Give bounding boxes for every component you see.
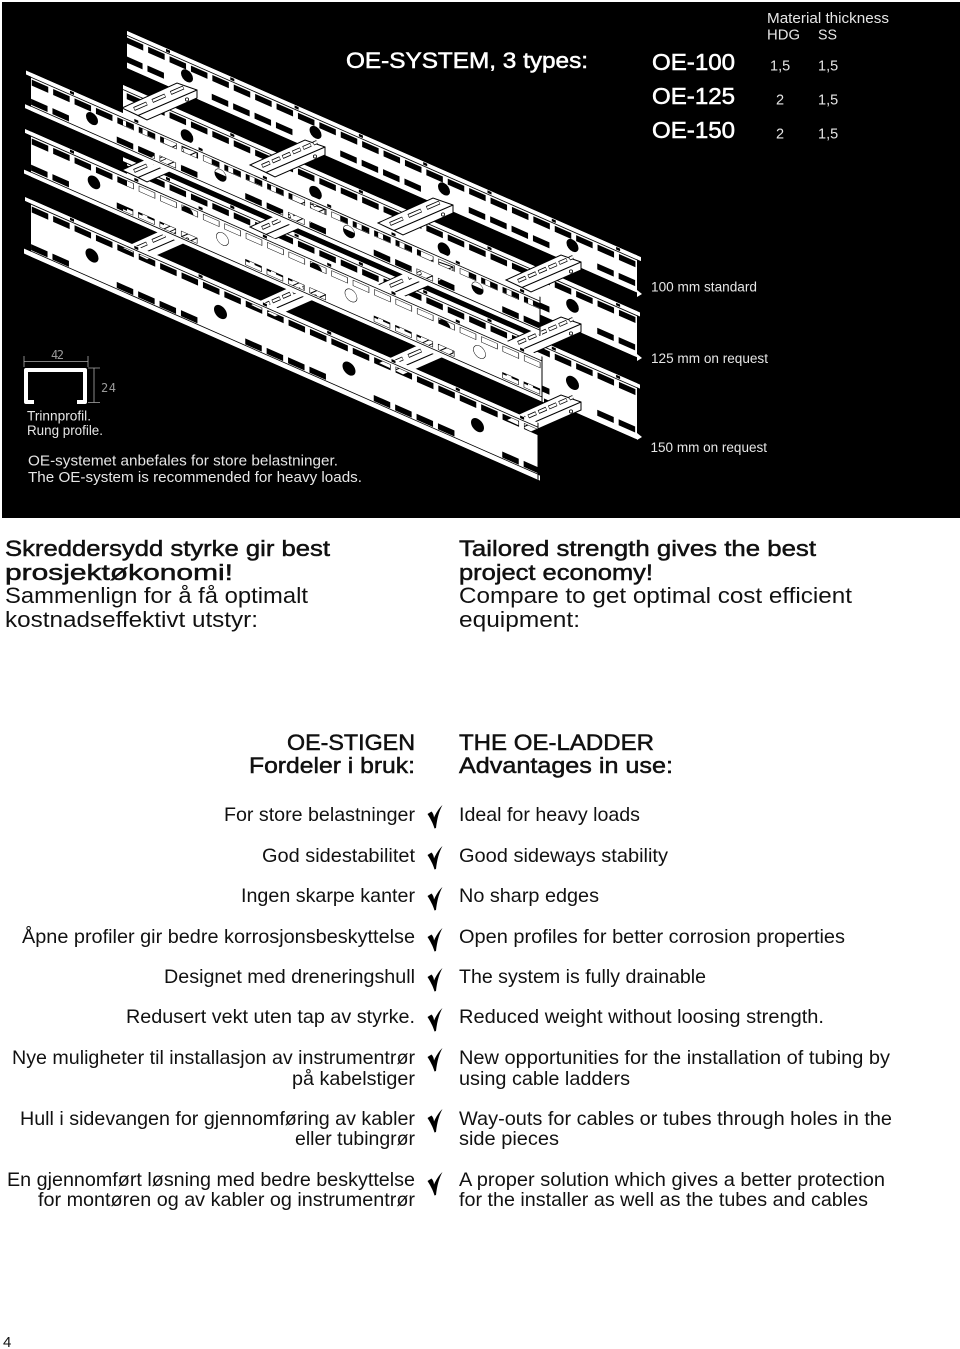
- table header: [767, 11, 889, 44]
- list: Norwegian advantages: eller tubingrør: [295, 1128, 416, 1150]
- table header: SS: [818, 28, 837, 44]
- list: Norwegian advantages: Hull i sidevangen for gjennomføring av kabler: [20, 1108, 415, 1130]
- text block: English intro: equipment:: [459, 607, 580, 632]
- heading: Norwegian advantages: Fordeler i bruk:: [249, 753, 415, 778]
- text block: English intro: [459, 536, 852, 632]
- list: English advantages: The system is fully drainable: [459, 966, 706, 988]
- text block: English intro: Compare to get optimal cost efficient: [459, 583, 852, 608]
- row: OE-150: 2: [776, 126, 784, 142]
- heading: English advantages: [459, 730, 673, 778]
- text block: Norwegian intro: prosjektøkonomi!: [5, 560, 233, 585]
- list: Norwegian advantages: For store belastninger: [224, 804, 415, 826]
- heading: Norwegian advantages: [249, 730, 415, 778]
- caption: rung profile: Trinnprofil.: [27, 408, 91, 424]
- row: OE-150: 1,5: [818, 126, 838, 142]
- ladder: 100 mm: [25, 31, 641, 336]
- row: OE-125: 2: [776, 92, 784, 108]
- illustration: three OE cable ladders: [24, 31, 642, 481]
- label: height options: 150 mm on request: [650, 440, 767, 455]
- icons: check marks: [428, 805, 442, 1196]
- label: height options: 125 mm on request: [651, 351, 768, 366]
- rail: back 100 mm: [127, 31, 641, 294]
- row: OE-100: OE-100: [652, 49, 735, 75]
- list: English advantages: Open profiles for better corrosion properties: [459, 926, 845, 948]
- list: English advantages: Reduced weight without loosing strength.: [459, 1006, 824, 1028]
- list: Norwegian advantages: En gjennomført løsning med bedre beskyttelse: [7, 1169, 415, 1191]
- list: English advantages: No sharp edges: [459, 885, 599, 907]
- label: height options: [650, 280, 768, 455]
- rail: back 150 mm: [123, 157, 640, 441]
- heading: Norwegian advantages: OE-STIGEN: [287, 730, 415, 755]
- list: Norwegian advantages: Ingen skarpe kanter: [241, 885, 416, 907]
- caption: rung profile: Rung profile.: [27, 422, 103, 438]
- caption: rung profile: [27, 408, 103, 438]
- row: OE-100: 1,5: [818, 58, 838, 74]
- list: English advantages: Good sideways stability: [459, 845, 668, 867]
- list: Norwegian advantages: God sidestabilitet: [262, 845, 416, 867]
- list: English advantages: [459, 804, 892, 1211]
- heading: OE-system types: OE-SYSTEM, 3 types:: [346, 48, 588, 73]
- text block: English intro: project economy!: [459, 560, 653, 585]
- list: Norwegian advantages: Designet med dreneringshull: [164, 966, 415, 988]
- list: English advantages: A proper solution which gives a better protection: [459, 1169, 885, 1191]
- rail: front 100 mm: [25, 70, 542, 336]
- row: OE-150: [652, 117, 838, 143]
- text block: Norwegian intro: [5, 536, 330, 632]
- caption: recommendation: The OE-system is recommended for heavy loads.: [28, 469, 362, 486]
- panel: black product panel: [2, 2, 960, 518]
- row: OE-150: OE-150: [652, 117, 735, 143]
- heading: English advantages: THE OE-LADDER: [459, 730, 654, 755]
- list: Norwegian advantages: Nye muligheter til installasjon av instrumentrør: [12, 1047, 415, 1069]
- text block: Norwegian intro: Sammenlign for å få optimalt: [5, 583, 308, 608]
- list: Norwegian advantages: Åpne profiler gir bedre korrosjonsbeskyttelse: [22, 925, 415, 948]
- list: English advantages: New opportunities for the installation of tubing by: [459, 1047, 890, 1069]
- list: Norwegian advantages: [7, 804, 416, 1211]
- text block: Norwegian intro: kostnadseffektivt utstyr:: [5, 607, 258, 632]
- rungs: 125 mm: [122, 145, 581, 354]
- heading: English advantages: Advantages in use:: [459, 753, 673, 778]
- text block: Norwegian intro: Skreddersydd styrke gir best: [5, 536, 330, 561]
- rungs: 150 mm: [122, 223, 581, 432]
- list: English advantages: for the installer as well as the tubes and cables: [459, 1189, 868, 1211]
- rungs: 100 mm: [122, 83, 581, 292]
- label: height options: 100 mm standard: [651, 280, 757, 294]
- icon: rung profile with dimensions: 42: [51, 348, 64, 362]
- ladder: 150 mm: [24, 157, 640, 481]
- list: Norwegian advantages: på kabelstiger: [292, 1068, 415, 1090]
- row: OE-125: [652, 83, 838, 109]
- table header: HDG: [767, 28, 800, 44]
- table: types and material thickness: [652, 11, 889, 143]
- list: English advantages: Ideal for heavy loads: [459, 804, 640, 826]
- row: OE-125: 1,5: [818, 92, 838, 108]
- list: English advantages: side pieces: [459, 1128, 559, 1150]
- rail: front 150 mm: [24, 197, 540, 481]
- row: OE-100: [652, 49, 838, 75]
- list: Norwegian advantages: for montøren og av kabler og instrumentrør: [38, 1189, 416, 1211]
- rail: back 125 mm: [123, 85, 640, 359]
- table header: Material thickness: [767, 11, 889, 27]
- row: OE-125: OE-125: [652, 83, 735, 109]
- rail end tips: [637, 290, 642, 440]
- caption: recommendation: OE-systemet anbefales for store belastninger.: [28, 452, 338, 470]
- list: Norwegian advantages: Redusert vekt uten tap av styrke.: [126, 1006, 415, 1028]
- ladder: 125 mm: [24, 85, 640, 402]
- list: English advantages: using cable ladders: [459, 1068, 630, 1090]
- rail: front 125 mm: [24, 129, 544, 402]
- text block: English intro: Tailored strength gives the best: [459, 536, 816, 561]
- caption: recommendation: [28, 452, 362, 486]
- row: OE-100: 1,5: [770, 58, 790, 74]
- icon: rung profile with dimensions: 24: [101, 381, 116, 395]
- icon: rung profile with dimensions: [24, 348, 116, 402]
- list: English advantages: Way-outs for cables or tubes through holes in the: [459, 1108, 892, 1130]
